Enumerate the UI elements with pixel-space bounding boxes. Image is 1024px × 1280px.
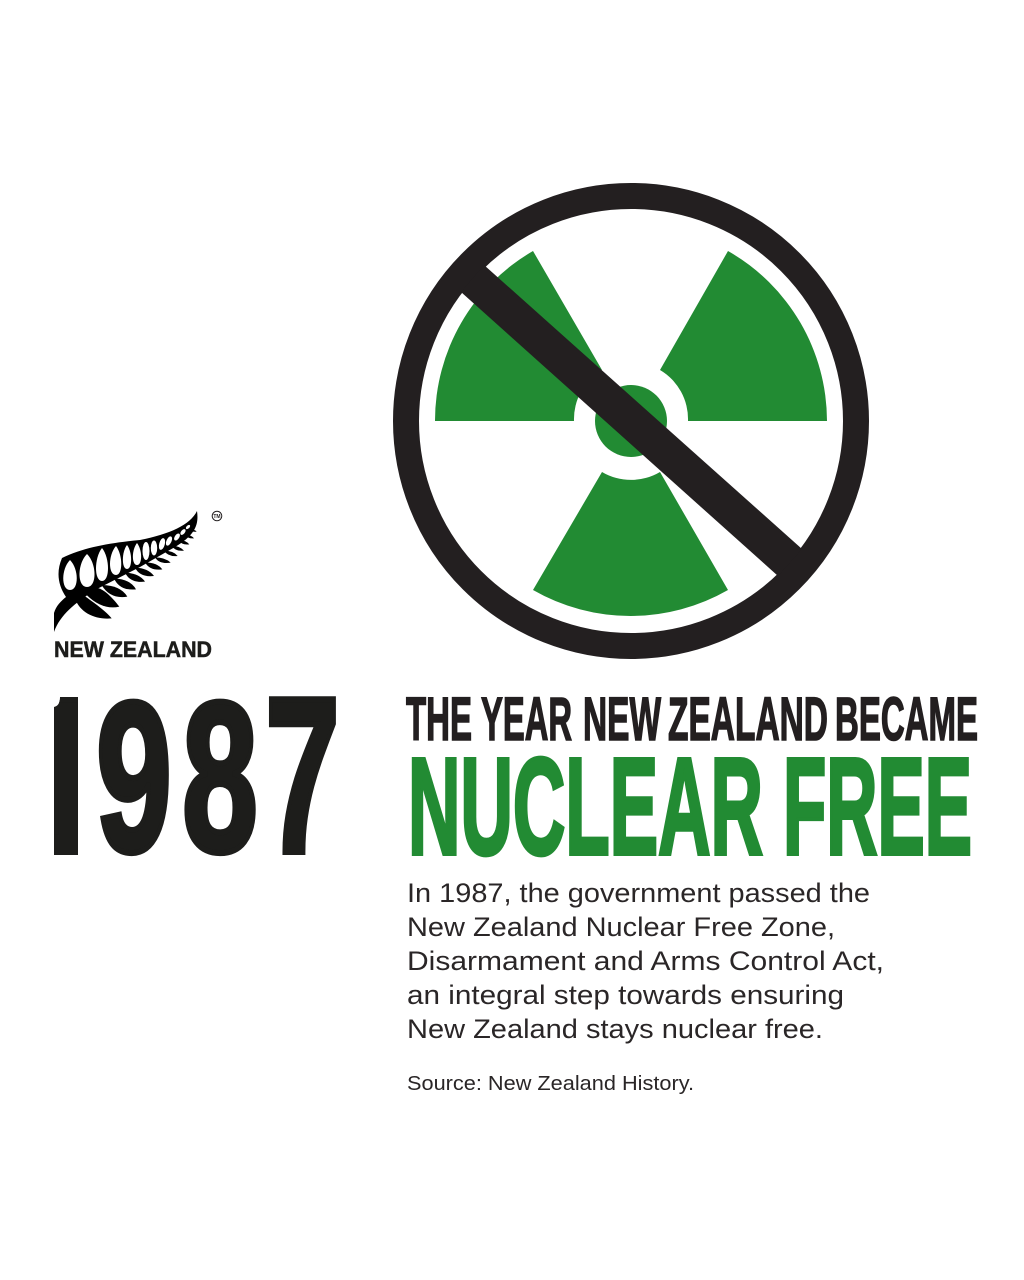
icon: nuclear free symbol xyxy=(406,196,856,646)
heading: the year New Zealand became: ZEALAND xyxy=(668,685,828,753)
heading: the year New Zealand became xyxy=(406,685,978,753)
body text xyxy=(407,878,884,1044)
heading: the year New Zealand became: THE xyxy=(406,685,472,753)
logo wordmark: NEW ZEALAND xyxy=(54,637,212,662)
source note: Source: New Zealand History. xyxy=(407,1073,694,1095)
icon: prohibition slash xyxy=(461,265,802,576)
icon: prohibition ring xyxy=(406,196,856,646)
icon: trademark symbol xyxy=(212,511,222,521)
body text: Disarmament and Arms Control Act, xyxy=(407,946,884,976)
big year number: 1 xyxy=(16,652,112,902)
icon: radiation trefoil xyxy=(435,251,827,616)
icon: silver fern xyxy=(54,511,197,632)
logo: New Zealand fern mark xyxy=(54,511,222,662)
big year number: 9 xyxy=(96,658,172,897)
heading: the year New Zealand became: YEAR xyxy=(481,685,572,753)
big year number: 7 xyxy=(265,652,340,900)
big year number xyxy=(54,696,336,856)
body text: New Zealand Nuclear Free Zone, xyxy=(407,912,835,942)
big year number: 8 xyxy=(182,658,258,897)
body text: New Zealand stays nuclear free. xyxy=(407,1014,823,1044)
body text: In 1987, the government passed the xyxy=(407,878,870,908)
body text: an integral step towards ensuring xyxy=(407,980,844,1010)
icon: trademark symbol: TM xyxy=(213,514,221,520)
heading: the year New Zealand became: NEW xyxy=(583,685,661,753)
